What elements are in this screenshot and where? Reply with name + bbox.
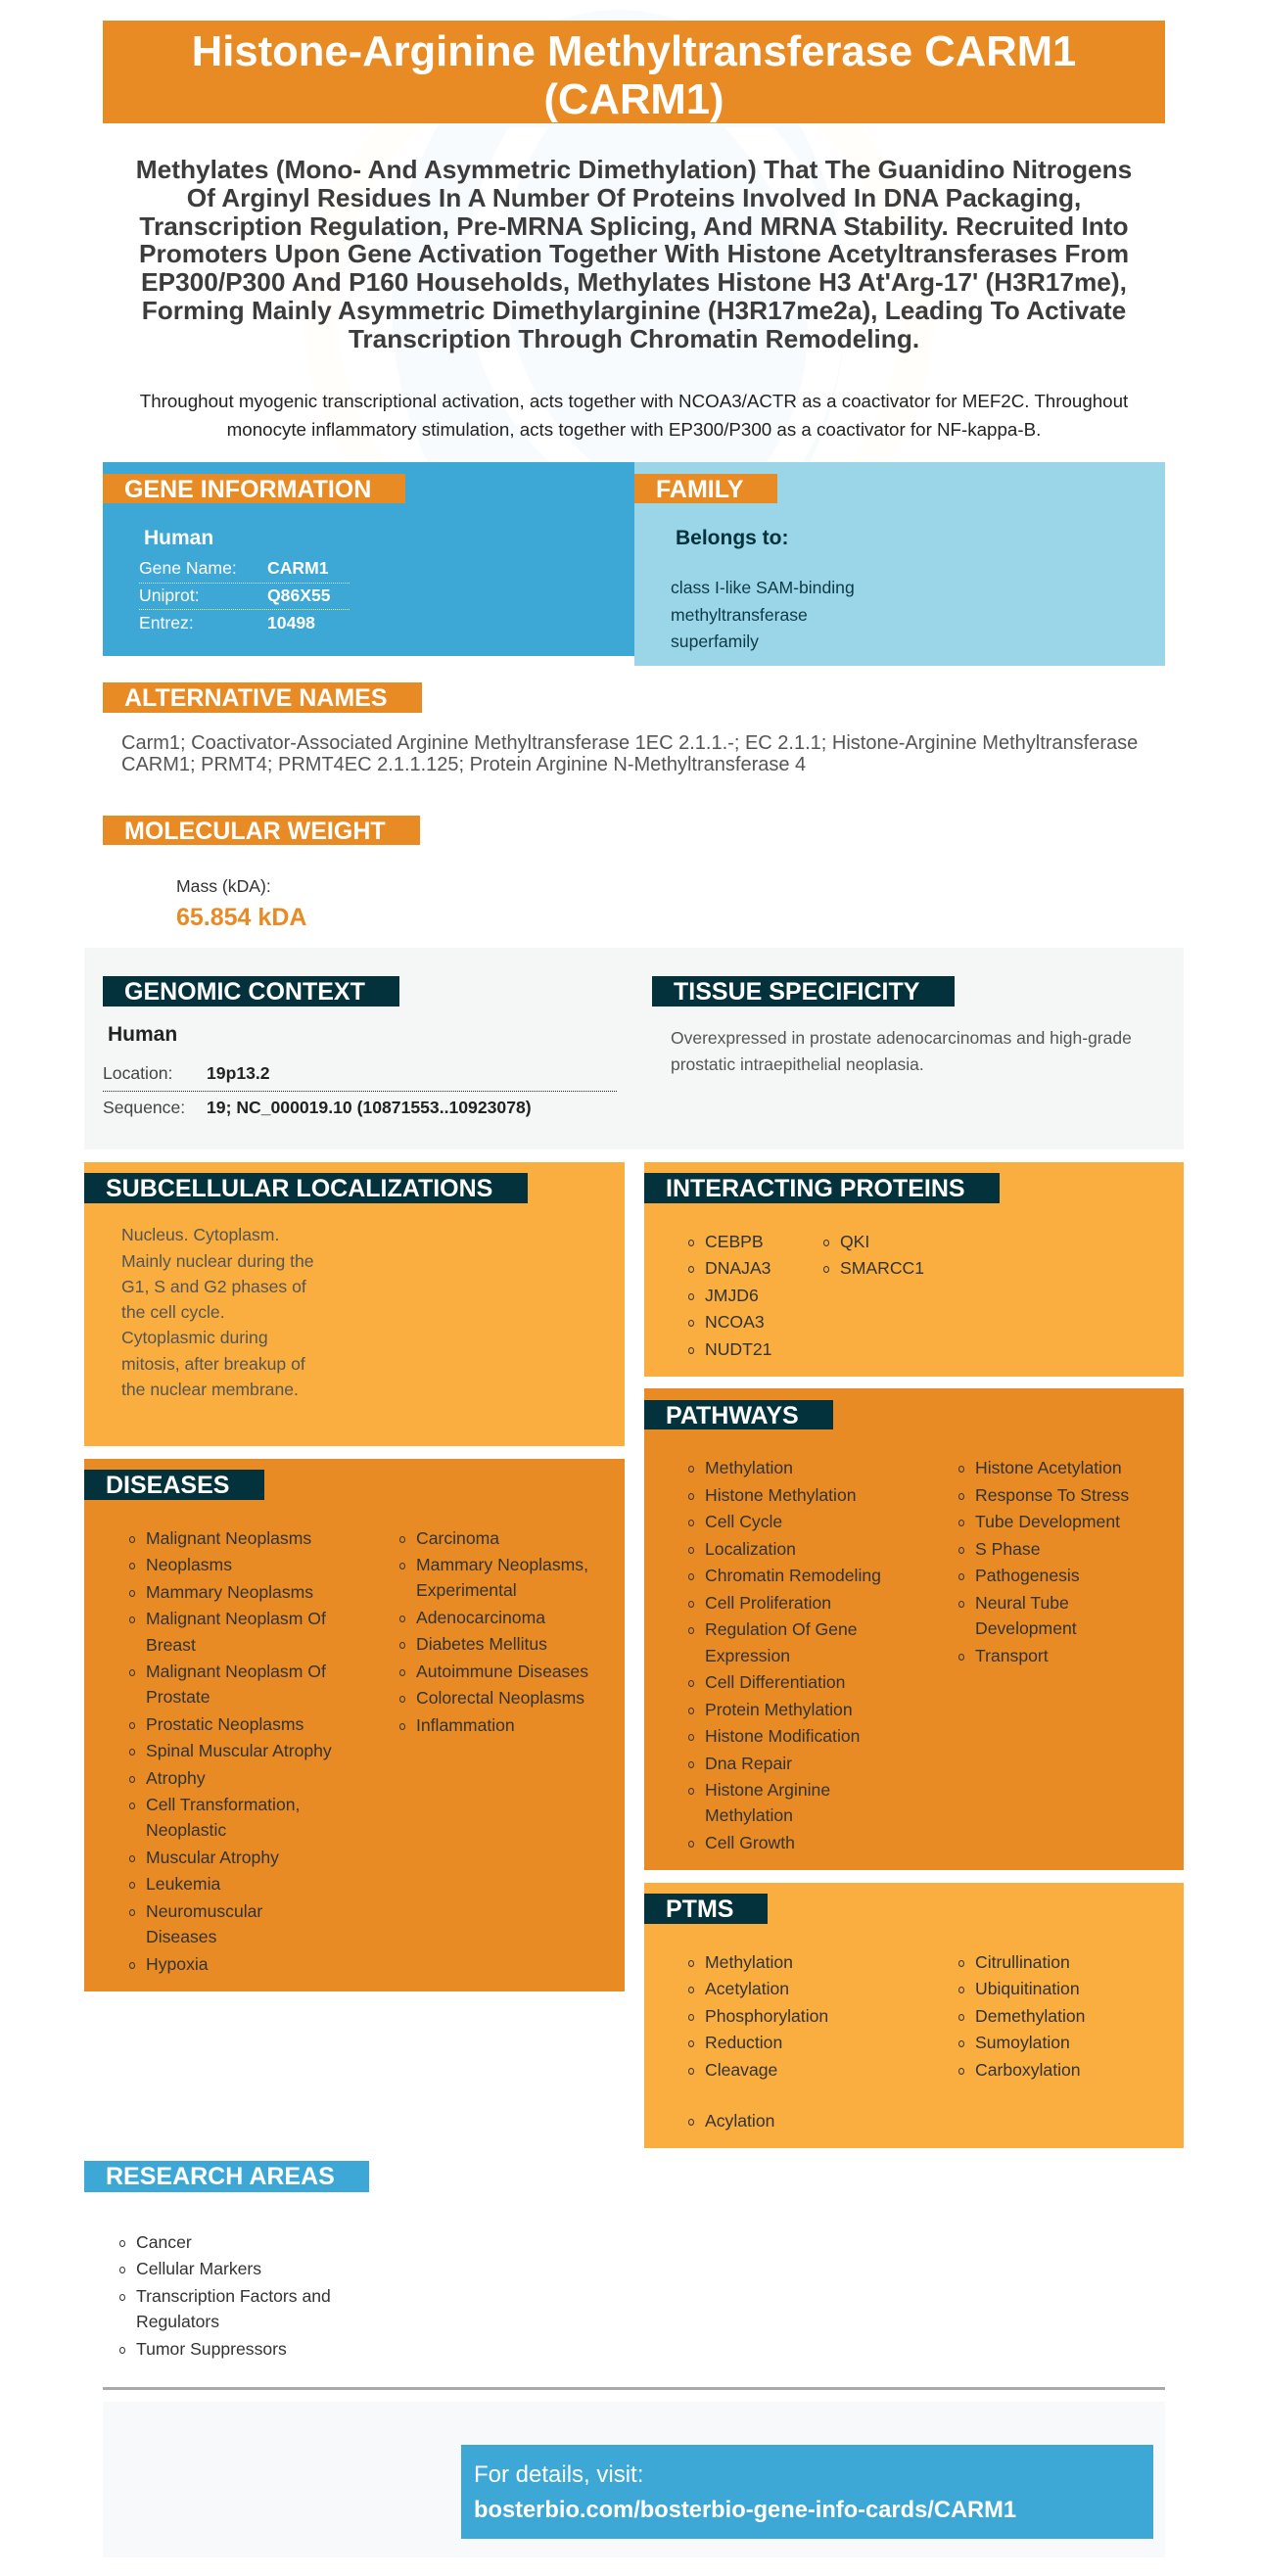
- function summary text: Throughout myogenic transcriptional activation, acts together with NCOA3/ACTR as a coactivator for MEF2C. Throughout: [140, 391, 1128, 411]
- panel: family: [634, 462, 1165, 666]
- panel: gene information: Uniprot:: [139, 585, 200, 605]
- callout: details link: bosterbio.com/bosterbio-gene-info-cards/CARM1: [474, 2498, 1016, 2523]
- panel: pathways: Cell Cycle: [705, 1512, 782, 1531]
- function summary text: [140, 391, 1128, 440]
- heading: molecular weight: MOLECULAR WEIGHT: [124, 818, 386, 845]
- panel: subcellular localizations: [84, 1162, 625, 1446]
- panel: diseases: [84, 1459, 625, 1991]
- panel: diseases: Cell Transformation,: [146, 1795, 300, 1814]
- panel: genomic context and tissue specificity: 19; NC_000019.10 (10871553..10923078): [207, 1098, 532, 1117]
- panel: pathways: Expression: [705, 1646, 790, 1665]
- panel: pathways: Methylation: [705, 1458, 793, 1477]
- panel: PTMs: Sumoylation: [975, 2033, 1070, 2052]
- panel: pathways: Transport: [975, 1646, 1049, 1665]
- panel: diseases: Breast: [146, 1635, 196, 1655]
- research areas list: Tumor Suppressors: [136, 2339, 287, 2359]
- panel: pathways: Dna Repair: [705, 1754, 792, 1773]
- panel: genomic context and tissue specificity: Sequence:: [103, 1098, 185, 1117]
- molecular weight value: [176, 876, 306, 931]
- panel: diseases: Adenocarcinoma: [416, 1608, 545, 1627]
- panel: diseases: Prostatic Neoplasms: [146, 1714, 304, 1734]
- panel: interacting proteins: INTERACTING PROTEINS: [666, 1175, 965, 1202]
- panel: subcellular localizations: Mainly nuclear during the: [121, 1251, 314, 1271]
- panel: pathways: Neural Tube: [975, 1593, 1069, 1613]
- alternative names text: [121, 732, 1138, 775]
- panel: subcellular localizations: the cell cycle.: [121, 1302, 225, 1322]
- panel: diseases: Experimental: [416, 1580, 517, 1600]
- research areas list: Regulators: [136, 2312, 219, 2331]
- panel: gene information: [103, 462, 634, 656]
- panel: diseases: Neoplasms: [146, 1555, 232, 1574]
- panel: genomic context and tissue specificity: 19p13.2: [207, 1063, 270, 1083]
- panel: diseases: Mammary Neoplasms,: [416, 1555, 588, 1574]
- panel: PTMs: PTMS: [666, 1896, 733, 1923]
- panel: PTMs: Reduction: [705, 2033, 782, 2052]
- panel: diseases: Malignant Neoplasm Of: [146, 1609, 326, 1628]
- panel: diseases: Neoplastic: [146, 1820, 226, 1840]
- function description heading: [136, 155, 1132, 353]
- panel: diseases: Inflammation: [416, 1715, 515, 1735]
- molecular weight value: 65.854 kDA: [176, 904, 306, 931]
- panel: pathways: Histone Acetylation: [975, 1458, 1122, 1477]
- callout: details link: [461, 2445, 1153, 2539]
- panel: family: FAMILY: [656, 476, 743, 503]
- panel: diseases: Neuromuscular: [146, 1901, 262, 1921]
- research areas list: Cellular Markers: [136, 2259, 261, 2278]
- panel: pathways: Development: [975, 1618, 1077, 1638]
- heading: alternative names: ALTERNATIVE NAMES: [124, 684, 388, 712]
- panel: diseases: Muscular Atrophy: [146, 1848, 279, 1867]
- panel: PTMs: Acetylation: [705, 1979, 789, 1998]
- panel: pathways: [644, 1388, 1184, 1870]
- panel: pathways: Histone Methylation: [705, 1485, 857, 1505]
- panel: gene information: GENE INFORMATION: [124, 476, 371, 503]
- panel: diseases: Hypoxia: [146, 1954, 209, 1974]
- panel: family: methyltransferase: [671, 605, 808, 625]
- panel: subcellular localizations: the nuclear membrane.: [121, 1380, 299, 1399]
- panel: diseases: Diseases: [146, 1927, 216, 1946]
- panel: diseases: Spinal Muscular Atrophy: [146, 1741, 332, 1760]
- panel: gene information: Human: [144, 527, 213, 549]
- panel: subcellular localizations: mitosis, after breakup of: [121, 1354, 305, 1374]
- panel: interacting proteins: SMARCC1: [840, 1258, 924, 1278]
- background watermark logo: [0, 0, 1261, 685]
- research areas list: [119, 2232, 331, 2359]
- panel: subcellular localizations: SUBCELLULAR LOCALIZATIONS: [106, 1175, 492, 1202]
- panel: pathways: Protein Methylation: [705, 1700, 853, 1719]
- alternative names text: Carm1; Coactivator-Associated Arginine Methyltransferase 1EC 2.1.1.-; EC 2.1.1; Histone-Arginine Methyltransferase: [121, 732, 1138, 754]
- panel: genomic context and tissue specificity: prostatic intraepithelial neoplasia.: [671, 1054, 924, 1074]
- panel: gene information: 10498: [267, 613, 315, 632]
- panel: interacting proteins: [644, 1162, 1184, 1377]
- panel: diseases: Diabetes Mellitus: [416, 1634, 547, 1654]
- panel: interacting proteins: NCOA3: [705, 1312, 765, 1332]
- panel: genomic context and tissue specificity: Location:: [103, 1063, 172, 1083]
- panel: genomic context and tissue specificity: Human: [108, 1023, 177, 1046]
- panel: gene information: Gene Name:: [139, 558, 237, 578]
- panel: diseases: Prostate: [146, 1687, 210, 1707]
- heading: research areas: RESEARCH AREAS: [106, 2163, 335, 2190]
- function description heading: EP300/P300 And P160 Households, Methylates Histone H3 At'Arg-17' (H3R17me),: [141, 267, 1127, 297]
- panel: pathways: Histone Modification: [705, 1726, 860, 1746]
- panel: genomic context and tissue specificity: [84, 948, 1184, 1149]
- panel: PTMs: Citrullination: [975, 1952, 1070, 1972]
- panel: pathways: S Phase: [975, 1539, 1041, 1559]
- panel: pathways: Regulation Of Gene: [705, 1619, 858, 1639]
- panel: diseases: DISEASES: [106, 1472, 229, 1499]
- panel: interacting proteins: DNAJA3: [705, 1258, 771, 1278]
- panel: diseases: Atrophy: [146, 1768, 206, 1788]
- research areas list: Cancer: [136, 2232, 192, 2252]
- panel: PTMs: Demethylation: [975, 2006, 1085, 2026]
- panel: pathways: Pathogenesis: [975, 1566, 1080, 1585]
- panel: pathways: Cell Proliferation: [705, 1593, 831, 1613]
- panel: diseases: Leukemia: [146, 1874, 220, 1894]
- panel: interacting proteins: QKI: [840, 1232, 869, 1251]
- function description heading: Forming Mainly Asymmetric Dimethylarginine (H3R17me2a), Leading To Activate: [142, 296, 1126, 325]
- panel: pathways: PATHWAYS: [666, 1402, 799, 1429]
- panel: diseases: Malignant Neoplasms: [146, 1528, 311, 1548]
- molecular weight value: Mass (kDA):: [176, 876, 271, 896]
- panel: interacting proteins: NUDT21: [705, 1339, 771, 1359]
- panel: diseases: Autoimmune Diseases: [416, 1662, 588, 1681]
- research areas list: Transcription Factors and: [136, 2286, 331, 2306]
- function summary text: monocyte inflammatory stimulation, acts together with EP300/P300 as a coactivator for NF-kappa-B.: [227, 419, 1041, 440]
- panel: PTMs: Ubiquitination: [975, 1979, 1080, 1998]
- function description heading: Transcription Regulation, Pre-MRNA Splicing, And MRNA Stability. Recruited Into: [139, 211, 1129, 241]
- panel: diseases: Mammary Neoplasms: [146, 1582, 313, 1602]
- panel: PTMs: Acylation: [705, 2111, 774, 2131]
- panel: PTMs: Carboxylation: [975, 2060, 1081, 2080]
- panel: diseases: Carcinoma: [416, 1528, 499, 1548]
- function description heading: Of Arginyl Residues In A Number Of Proteins Involved In DNA Packaging,: [187, 183, 1081, 212]
- panel: pathways: Tube Development: [975, 1512, 1120, 1531]
- panel: family: superfamily: [671, 632, 759, 651]
- panel: interacting proteins: CEBPB: [705, 1232, 764, 1251]
- panel: PTMs: Methylation: [705, 1952, 793, 1972]
- alternative names text: CARM1; PRMT4; PRMT4EC 2.1.1.125; Protein Arginine N-Methyltransferase 4: [121, 754, 806, 775]
- panel: gene information: Entrez:: [139, 613, 194, 632]
- panel: subcellular localizations: Cytoplasmic during: [121, 1328, 268, 1347]
- title banner: Histone-Arginine Methyltransferase CARM1: [192, 28, 1076, 75]
- panel: subcellular localizations: G1, S and G2 phases of: [121, 1277, 306, 1296]
- function description heading: Transcription Through Chromatin Remodeling.: [349, 324, 919, 353]
- panel: diseases: Malignant Neoplasm Of: [146, 1662, 326, 1681]
- panel: pathways: Methylation: [705, 1805, 793, 1825]
- function description heading: Promoters Upon Gene Activation Together With Histone Acetyltransferases From: [139, 239, 1129, 268]
- panel: PTMs: Phosphorylation: [705, 2006, 828, 2026]
- panel: pathways: Localization: [705, 1539, 796, 1559]
- panel: pathways: Histone Arginine: [705, 1780, 830, 1800]
- panel: pathways: Response To Stress: [975, 1485, 1129, 1505]
- function description heading: Methylates (Mono- And Asymmetric Dimethylation) That The Guanidino Nitrogens: [136, 155, 1132, 184]
- panel: interacting proteins: JMJD6: [705, 1286, 759, 1305]
- panel: gene information: CARM1: [267, 558, 329, 578]
- panel: family: class I-like SAM-binding: [671, 578, 855, 597]
- panel: pathways: Cell Differentiation: [705, 1672, 845, 1692]
- title banner: (CARM1): [543, 76, 724, 123]
- panel: diseases: Colorectal Neoplasms: [416, 1688, 584, 1708]
- panel: genomic context and tissue specificity: GENOMIC CONTEXT: [124, 978, 365, 1006]
- panel: PTMs: [644, 1883, 1184, 2148]
- title banner: [103, 21, 1165, 123]
- callout: details link: For details, visit:: [474, 2461, 643, 2488]
- panel: pathways: Cell Growth: [705, 1833, 795, 1852]
- panel: subcellular localizations: Nucleus. Cytoplasm.: [121, 1225, 279, 1244]
- panel: genomic context and tissue specificity: Overexpressed in prostate adenocarcinomas and high-grade: [671, 1028, 1132, 1048]
- panel: pathways: Chromatin Remodeling: [705, 1566, 881, 1585]
- panel: genomic context and tissue specificity: TISSUE SPECIFICITY: [674, 978, 919, 1006]
- panel: family: Belongs to:: [676, 527, 789, 549]
- panel: gene information: Q86X55: [267, 585, 331, 605]
- panel: footer: [103, 2402, 1165, 2557]
- panel: PTMs: Cleavage: [705, 2060, 777, 2080]
